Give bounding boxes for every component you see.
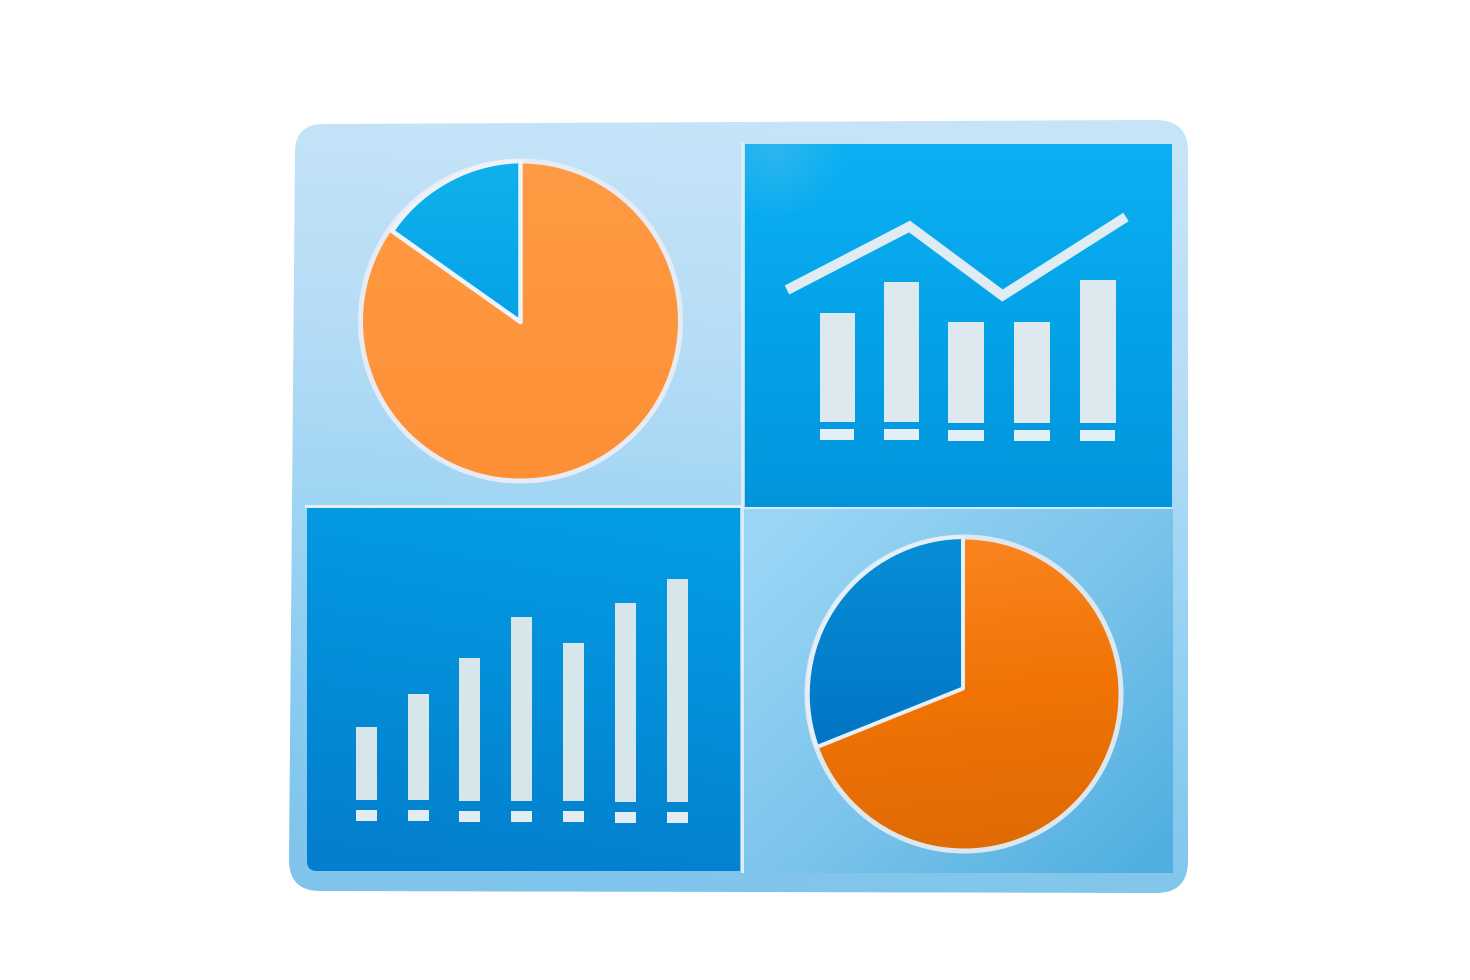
bar chart [820, 280, 1116, 423]
bar labels [820, 429, 1115, 441]
bar labels [356, 810, 688, 823]
panel: outer board [289, 120, 1188, 893]
pie slice: blue [392, 161, 520, 322]
panel: top-right line and bar chart [744, 144, 1172, 510]
bars [356, 579, 688, 802]
panel: bottom-left bar chart [305, 505, 742, 871]
panel: bottom-right pie chart [744, 509, 1173, 873]
vertical divider [741, 142, 744, 873]
pie slice: blue [808, 537, 963, 747]
panel: top-left pie chart [360, 161, 680, 481]
line chart [787, 217, 1126, 296]
